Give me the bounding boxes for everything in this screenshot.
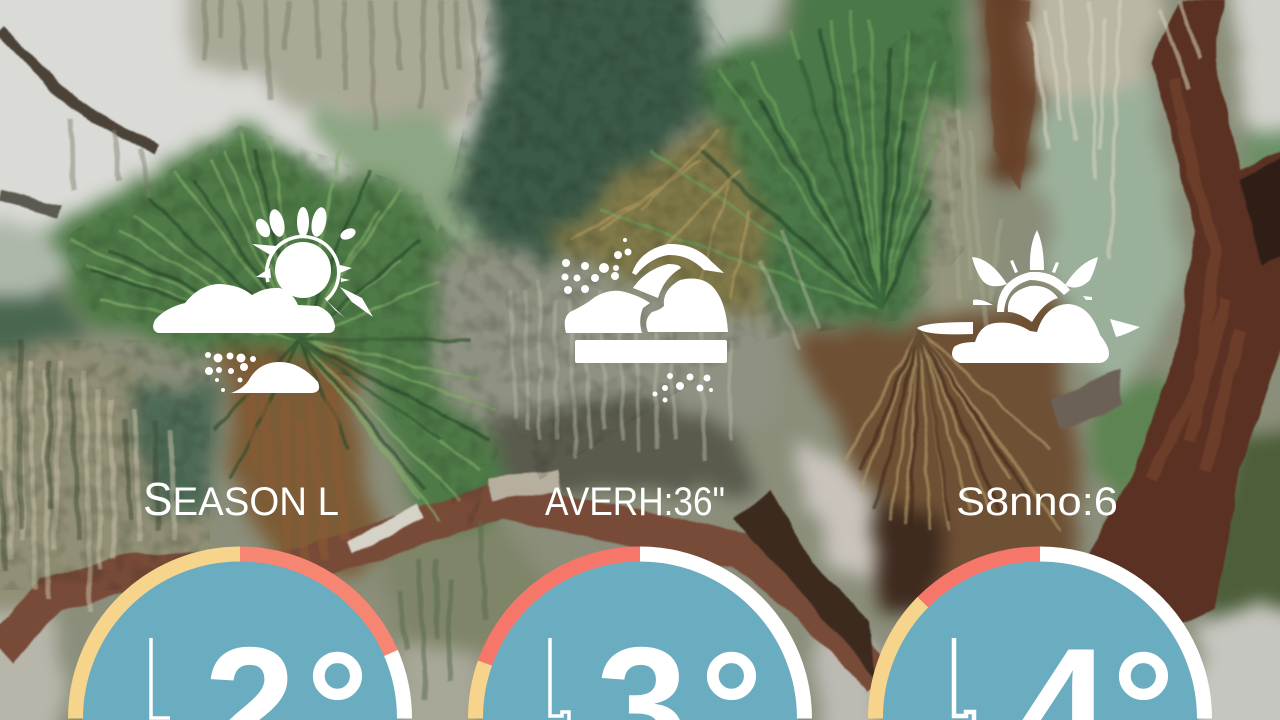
gauge disc — [482, 560, 798, 720]
ring segment: white — [640, 554, 804, 718]
tick mark — [151, 638, 170, 718]
hanging moss — [70, 0, 480, 200]
ring segment: red — [923, 554, 1040, 602]
icon: large cloud — [153, 284, 335, 333]
icon: sun with petal rays — [252, 206, 373, 318]
panel: season 3 weather icon — [917, 230, 1140, 363]
panel: season 2 weather icon — [562, 238, 728, 402]
branches — [0, 30, 155, 150]
ring segment: yellow — [875, 602, 923, 718]
gauge disc — [882, 560, 1198, 720]
icon: arc over sun — [632, 244, 724, 275]
label: season 3: S8nno:6 — [956, 480, 1118, 524]
icon: dots lower — [652, 373, 713, 402]
palm fronds — [70, 130, 495, 520]
tree trunk — [1085, 0, 1280, 640]
icon: sun with rays — [972, 230, 1098, 322]
icon: right cloud — [646, 278, 728, 332]
icon: right streak — [1110, 319, 1140, 337]
icon: cloud — [952, 304, 1109, 363]
tick mark — [550, 638, 569, 720]
label: season 1: SEASON L — [143, 473, 339, 525]
ring segment: yellow — [76, 554, 240, 718]
icon: left cloud — [565, 291, 650, 333]
ring segment: red — [485, 554, 640, 663]
icon: dots upper — [562, 238, 632, 294]
gauge disc — [82, 560, 398, 720]
icon: partial sun — [633, 264, 681, 298]
label: season 2: AVERH:36" — [545, 480, 725, 524]
gauge: season 1 — [76, 554, 405, 720]
ring segment: white — [1040, 554, 1204, 718]
panel: season 1 weather icon — [153, 206, 373, 393]
ring segment: white — [391, 653, 405, 718]
foliage speckle texture — [0, 0, 965, 590]
gauge: season 3 — [875, 554, 1204, 720]
icon: left streak — [917, 322, 973, 334]
ring segment: red — [240, 554, 391, 653]
tick mark — [954, 638, 974, 720]
icon: horizontal bar — [575, 340, 727, 363]
ring segment: yellow — [475, 663, 485, 718]
icon: small cloud with dots — [205, 352, 319, 393]
gauge: season 2 — [475, 554, 804, 720]
